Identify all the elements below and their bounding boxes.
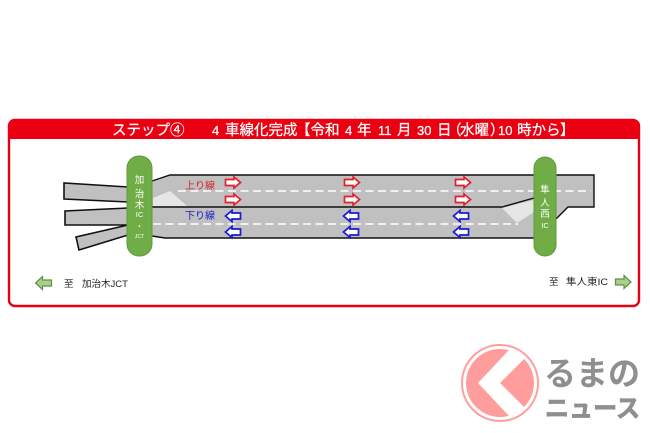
lane dashes — [153, 191, 591, 224]
interchange: Hayato-nishi IC: 人 — [540, 198, 550, 209]
interchange: Hayato-nishi IC — [534, 157, 556, 256]
logo text: ニュース — [545, 395, 640, 423]
merge zones — [153, 191, 534, 223]
heading: 年 — [357, 122, 372, 139]
heading: 30 — [417, 123, 431, 138]
logo text — [544, 355, 640, 423]
interchange: Kajiki IC / JCT: 木 — [135, 199, 145, 211]
heading: 水曜 — [460, 122, 489, 139]
heading: 】 — [560, 122, 574, 139]
interchange: Hayato-nishi IC: 隼 — [540, 184, 550, 196]
direction arrows: up line (red) — [226, 177, 470, 205]
road diagram — [64, 175, 594, 250]
heading: 4 — [345, 123, 352, 138]
heading — [112, 122, 574, 139]
interchange: Hayato-nishi IC: IC — [541, 221, 549, 230]
heading: 日 — [437, 123, 452, 139]
heading: 時から — [517, 122, 560, 139]
road outlines — [152, 175, 594, 238]
direction arrows: down line (blue) — [226, 210, 468, 238]
heading: ） — [490, 122, 504, 139]
heading: 月 — [397, 123, 412, 139]
road stubs: Kajiki side — [64, 183, 128, 250]
destination: right — [549, 276, 631, 288]
interchange: Kajiki IC / JCT: 治 — [135, 188, 145, 200]
heading: 4 — [212, 123, 219, 138]
interchange: Kajiki IC / JCT: IC — [136, 210, 144, 219]
heading: （ — [447, 122, 462, 139]
destination: left: 加治木JCT — [82, 278, 128, 290]
heading: ステップ④ — [112, 122, 184, 139]
heading: 10 — [498, 123, 512, 138]
interchange: Kajiki IC / JCT: ・ — [136, 222, 143, 231]
interchange: Kajiki IC / JCT: 加 — [135, 175, 144, 186]
interchange: Kajiki IC / JCT: JCT — [135, 234, 144, 240]
interchange: Hayato-nishi IC: 西 — [540, 209, 550, 220]
logo mark — [462, 345, 538, 421]
heading: 11 — [378, 123, 392, 138]
heading: 車線化完成 — [225, 122, 298, 139]
panel: step 4 frame — [8, 119, 640, 306]
label: down line: 下り線 — [185, 209, 215, 222]
panel header: red band — [8, 119, 640, 139]
destination: left: 至 — [64, 279, 74, 290]
destination: right: 隼人東IC — [566, 276, 608, 288]
interchange: Kajiki IC / JCT — [127, 156, 152, 256]
logo text: るまの — [544, 355, 640, 392]
heading: 【令和 — [296, 122, 340, 139]
main carriageway — [152, 175, 594, 238]
destination: left — [36, 276, 128, 290]
label: up line: 上り線 — [185, 179, 215, 192]
destination: right: 至 — [549, 277, 559, 288]
